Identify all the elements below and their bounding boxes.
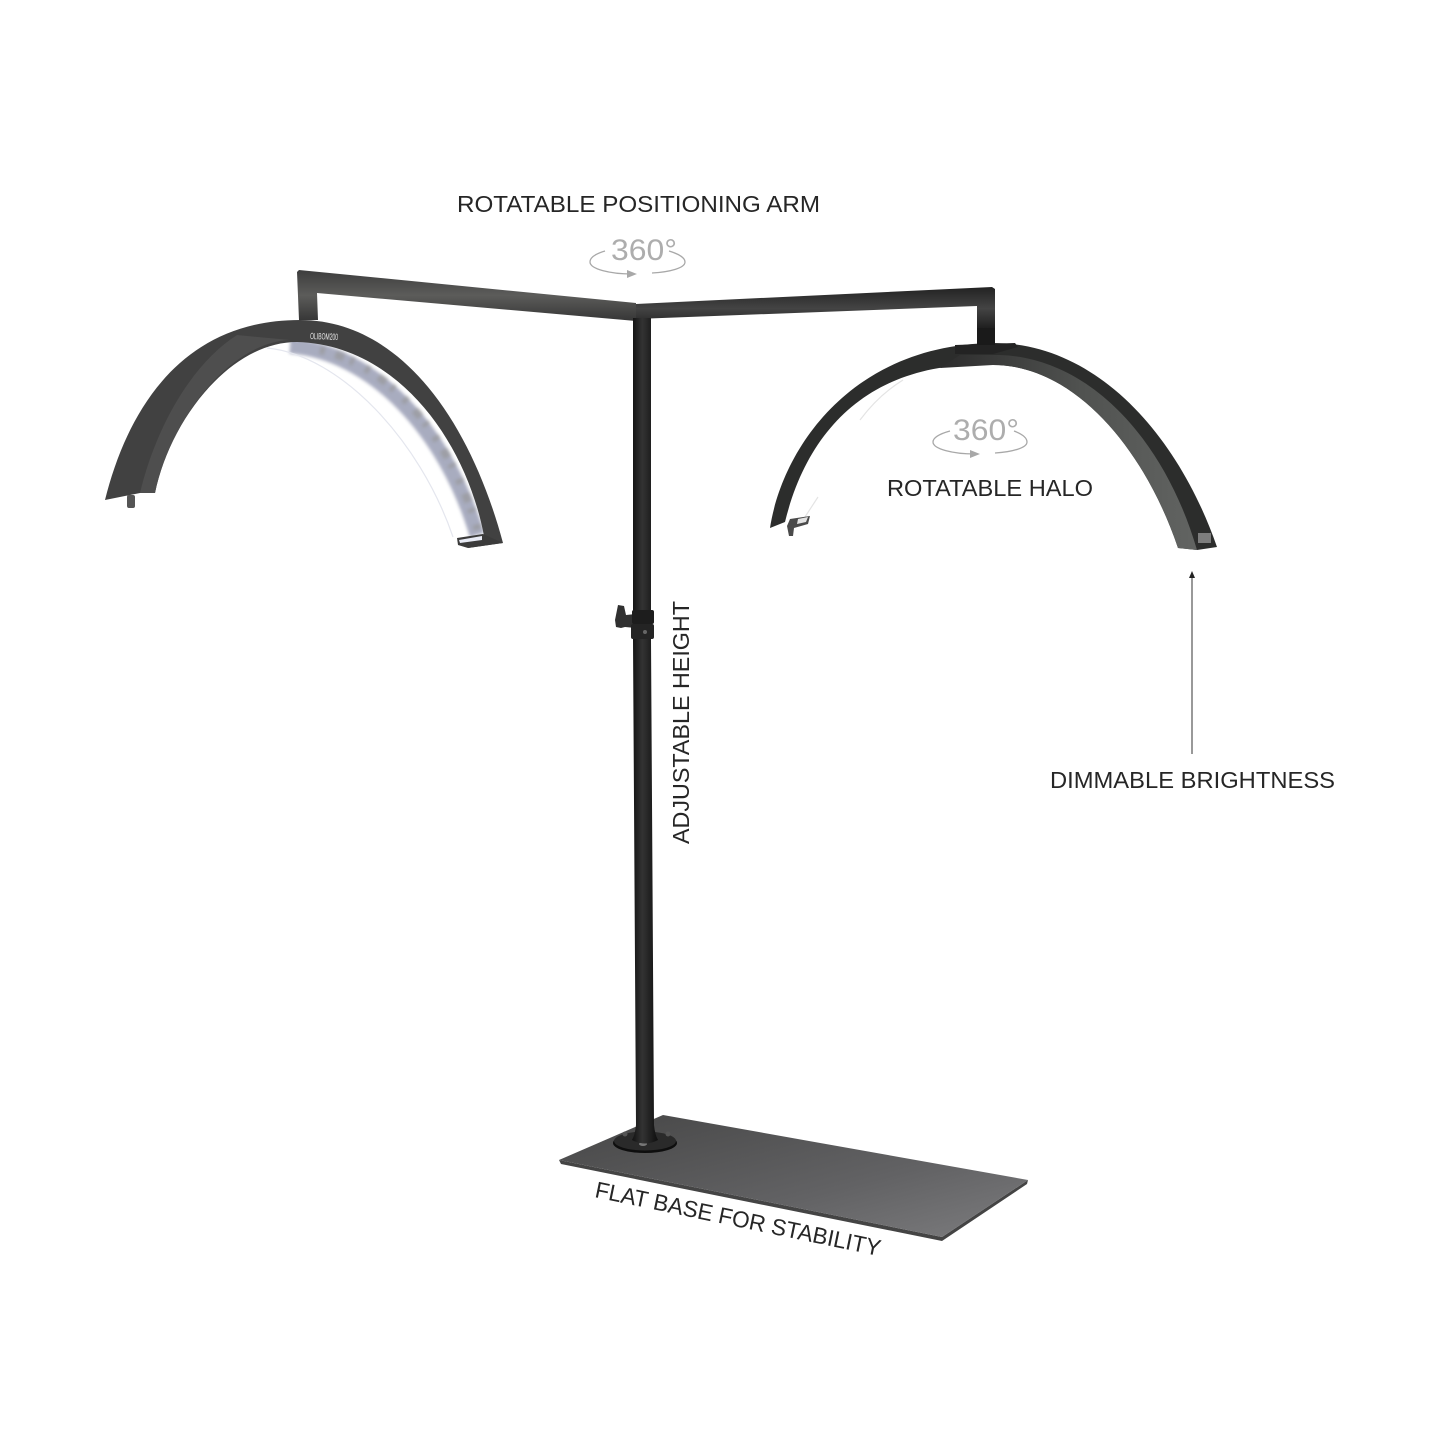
- soft reflection on inner face: [290, 346, 477, 535]
- left arm: [297, 270, 636, 321]
- swivel connector: [977, 328, 995, 345]
- LED highlights: [803, 380, 903, 520]
- end highlight: [797, 517, 808, 524]
- label: dimmable brightness: DIMMABLE BRIGHTNESS: [1050, 767, 1335, 793]
- left halo lamp: [105, 320, 503, 548]
- end clip: [787, 516, 810, 536]
- halo end clip: [457, 534, 503, 548]
- plate top: [559, 1115, 1028, 1237]
- telescopic pole: [632, 318, 658, 1144]
- icon: 360 degree rotation, arm: [590, 234, 685, 278]
- mount screw: [127, 495, 135, 508]
- brand mark: OLIBOM200: [310, 331, 338, 342]
- halo body: [770, 343, 1217, 550]
- plate edge: [559, 1160, 1028, 1241]
- icon: 360 degree rotation, halo: 360°: [953, 414, 1019, 447]
- halo end highlight: [459, 536, 482, 543]
- mottled reflection: [320, 350, 478, 530]
- mounting bracket: [955, 343, 1018, 354]
- height adjustment knob: [615, 605, 654, 639]
- pole flange: [613, 1132, 677, 1153]
- halo top face: [105, 320, 503, 548]
- right arm: [636, 287, 995, 330]
- end label patch: [1198, 533, 1211, 543]
- label: rotatable halo: ROTATABLE HALO: [887, 475, 1093, 501]
- arrow to dimmer: [1189, 571, 1195, 754]
- icon: 360 degree rotation, halo: [933, 414, 1027, 458]
- LED inner edge: [267, 348, 453, 537]
- right halo lamp: [770, 328, 1217, 550]
- label: rotatable positioning arm: ROTATABLE POSITIONING ARM: [457, 191, 820, 217]
- label: adjustable height: ADJUSTABLE HEIGHT: [668, 601, 694, 844]
- halo front face: [140, 335, 290, 493]
- halo lit face: [940, 355, 1197, 550]
- base plate: [559, 1115, 1028, 1241]
- label: flat base for stability: FLAT BASE FOR STABILITY: [593, 1176, 883, 1261]
- icon: 360 degree rotation, arm: 360°: [611, 234, 677, 267]
